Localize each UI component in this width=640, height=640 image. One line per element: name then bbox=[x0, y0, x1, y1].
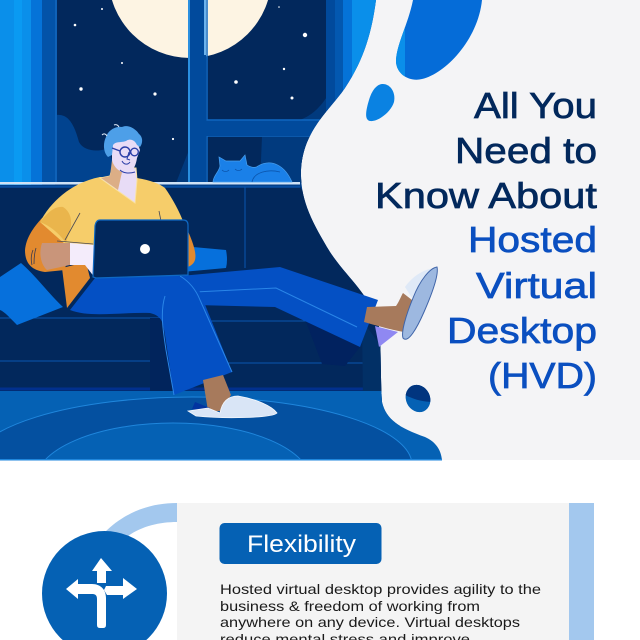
lower torso bbox=[62, 262, 90, 308]
hair strands bbox=[102, 125, 119, 136]
heading badge bbox=[220, 523, 382, 564]
front leg seam bbox=[162, 276, 232, 395]
yellow shirt bbox=[40, 177, 184, 262]
wall shadow shapes bbox=[56, 95, 330, 183]
front slipper bbox=[188, 396, 277, 418]
blob: small bbox=[366, 84, 394, 121]
front ankle bbox=[203, 375, 231, 411]
panel: flexibility bbox=[177, 503, 594, 640]
shirt creases bbox=[57, 211, 161, 244]
shirt cuff bbox=[70, 243, 95, 278]
title bbox=[375, 85, 597, 396]
right sleeve bbox=[181, 222, 195, 268]
hair bbox=[104, 126, 142, 157]
moon bbox=[108, 0, 272, 58]
body text: business & freedom of working from bbox=[220, 598, 480, 614]
hero background panel bbox=[0, 0, 640, 460]
window right upper pane bbox=[206, 0, 326, 120]
smile and chin line bbox=[120, 152, 135, 173]
title line: dark: Know About bbox=[375, 175, 597, 216]
chest and neck bbox=[100, 168, 137, 203]
neck shade bbox=[101, 160, 122, 190]
title line: dark bbox=[375, 85, 597, 216]
connector arc bbox=[104, 503, 177, 536]
shirt shade bbox=[40, 207, 71, 243]
title line: dark: Need to bbox=[455, 130, 597, 171]
title line: blue bbox=[447, 219, 597, 396]
forearm bbox=[40, 243, 70, 270]
back slipper sole bbox=[403, 267, 437, 339]
title line: blue: Hosted bbox=[468, 219, 597, 260]
wall bbox=[0, 0, 400, 460]
back leg seam bbox=[195, 288, 357, 327]
side cushion bbox=[0, 263, 63, 325]
title line: blue: Desktop bbox=[447, 310, 597, 351]
icon: direction arrows bbox=[42, 531, 167, 640]
sofa bbox=[0, 182, 385, 403]
back slipper top bbox=[405, 268, 434, 298]
title line: blue: Virtual bbox=[476, 265, 597, 306]
lilac shade bbox=[375, 326, 398, 347]
arm lines bbox=[31, 248, 36, 265]
heading badge: Flexibility bbox=[247, 531, 356, 558]
foot shadow bbox=[192, 402, 210, 412]
orange sleeve bbox=[25, 218, 70, 272]
right curtain bbox=[326, 0, 376, 112]
person bbox=[25, 125, 437, 418]
back leg bbox=[180, 267, 378, 347]
back ankle bbox=[364, 293, 412, 332]
face bbox=[112, 138, 140, 173]
hero illustration scene bbox=[0, 0, 442, 459]
window right lower pane bbox=[206, 136, 310, 183]
back cushion bbox=[188, 247, 227, 272]
blob: floating oval bbox=[406, 384, 430, 412]
title line: blue: (HVD) bbox=[488, 355, 597, 396]
glasses bbox=[112, 147, 138, 157]
cat bbox=[213, 155, 292, 182]
laptop logo bbox=[140, 244, 150, 254]
body text: anywhere on any device. Virtual desktops bbox=[220, 614, 520, 630]
laptop bbox=[93, 220, 188, 278]
stars bbox=[74, 6, 307, 140]
blob: large bbox=[396, 0, 482, 80]
left curtain bbox=[0, 0, 55, 185]
floor bbox=[0, 391, 450, 461]
window frame bbox=[55, 0, 346, 183]
window left pane bbox=[56, 0, 188, 183]
panel accent bar bbox=[569, 503, 594, 640]
rug bbox=[0, 396, 412, 459]
title line: dark: All You bbox=[474, 85, 597, 126]
front leg bbox=[70, 275, 232, 395]
bottom edge line bbox=[0, 459, 442, 460]
body text bbox=[220, 581, 541, 640]
body text: Hosted virtual desktop provides agility to the bbox=[220, 581, 541, 597]
